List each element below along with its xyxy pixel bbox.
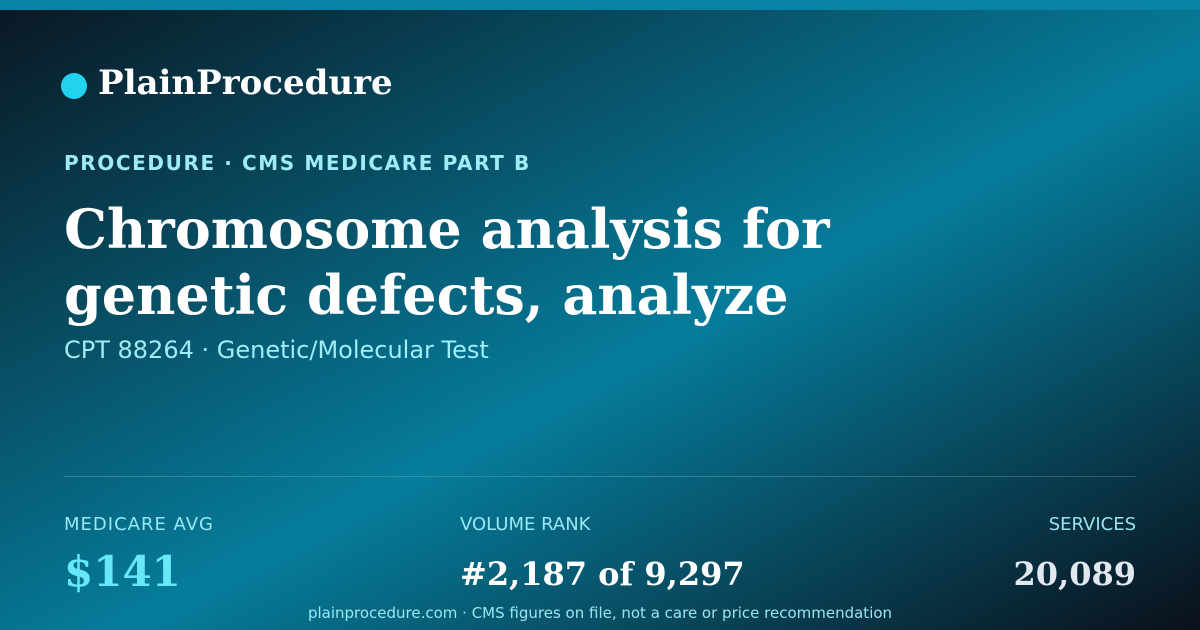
logo: dot (61, 73, 87, 99)
stat value: #2,187 of 9,297 (460, 555, 745, 593)
logo: wordmark: PlainProcedure (98, 63, 393, 103)
stat: medicare average (64, 514, 214, 596)
subtitle: CPT 88264 · Genetic/Molecular Test (64, 336, 489, 364)
stat value: $141 (64, 547, 181, 596)
top accent bar (0, 0, 1200, 10)
title: genetic defects, analyze (64, 262, 789, 326)
title: Chromosome analysis for (64, 196, 830, 260)
stat value: 20,089 (1014, 555, 1136, 593)
stat: volume rank (460, 514, 745, 593)
footer note: plainprocedure.com · CMS figures on file, not a care or price recommendation (308, 604, 892, 622)
stat label: SERVICES (1049, 514, 1136, 535)
eyebrow: PROCEDURE · CMS MEDICARE PART B (64, 151, 531, 175)
title (64, 196, 830, 326)
stat label: MEDICARE AVG (64, 514, 214, 535)
stat label: VOLUME RANK (460, 514, 590, 535)
divider (64, 476, 1136, 477)
stat: services (1014, 514, 1136, 593)
